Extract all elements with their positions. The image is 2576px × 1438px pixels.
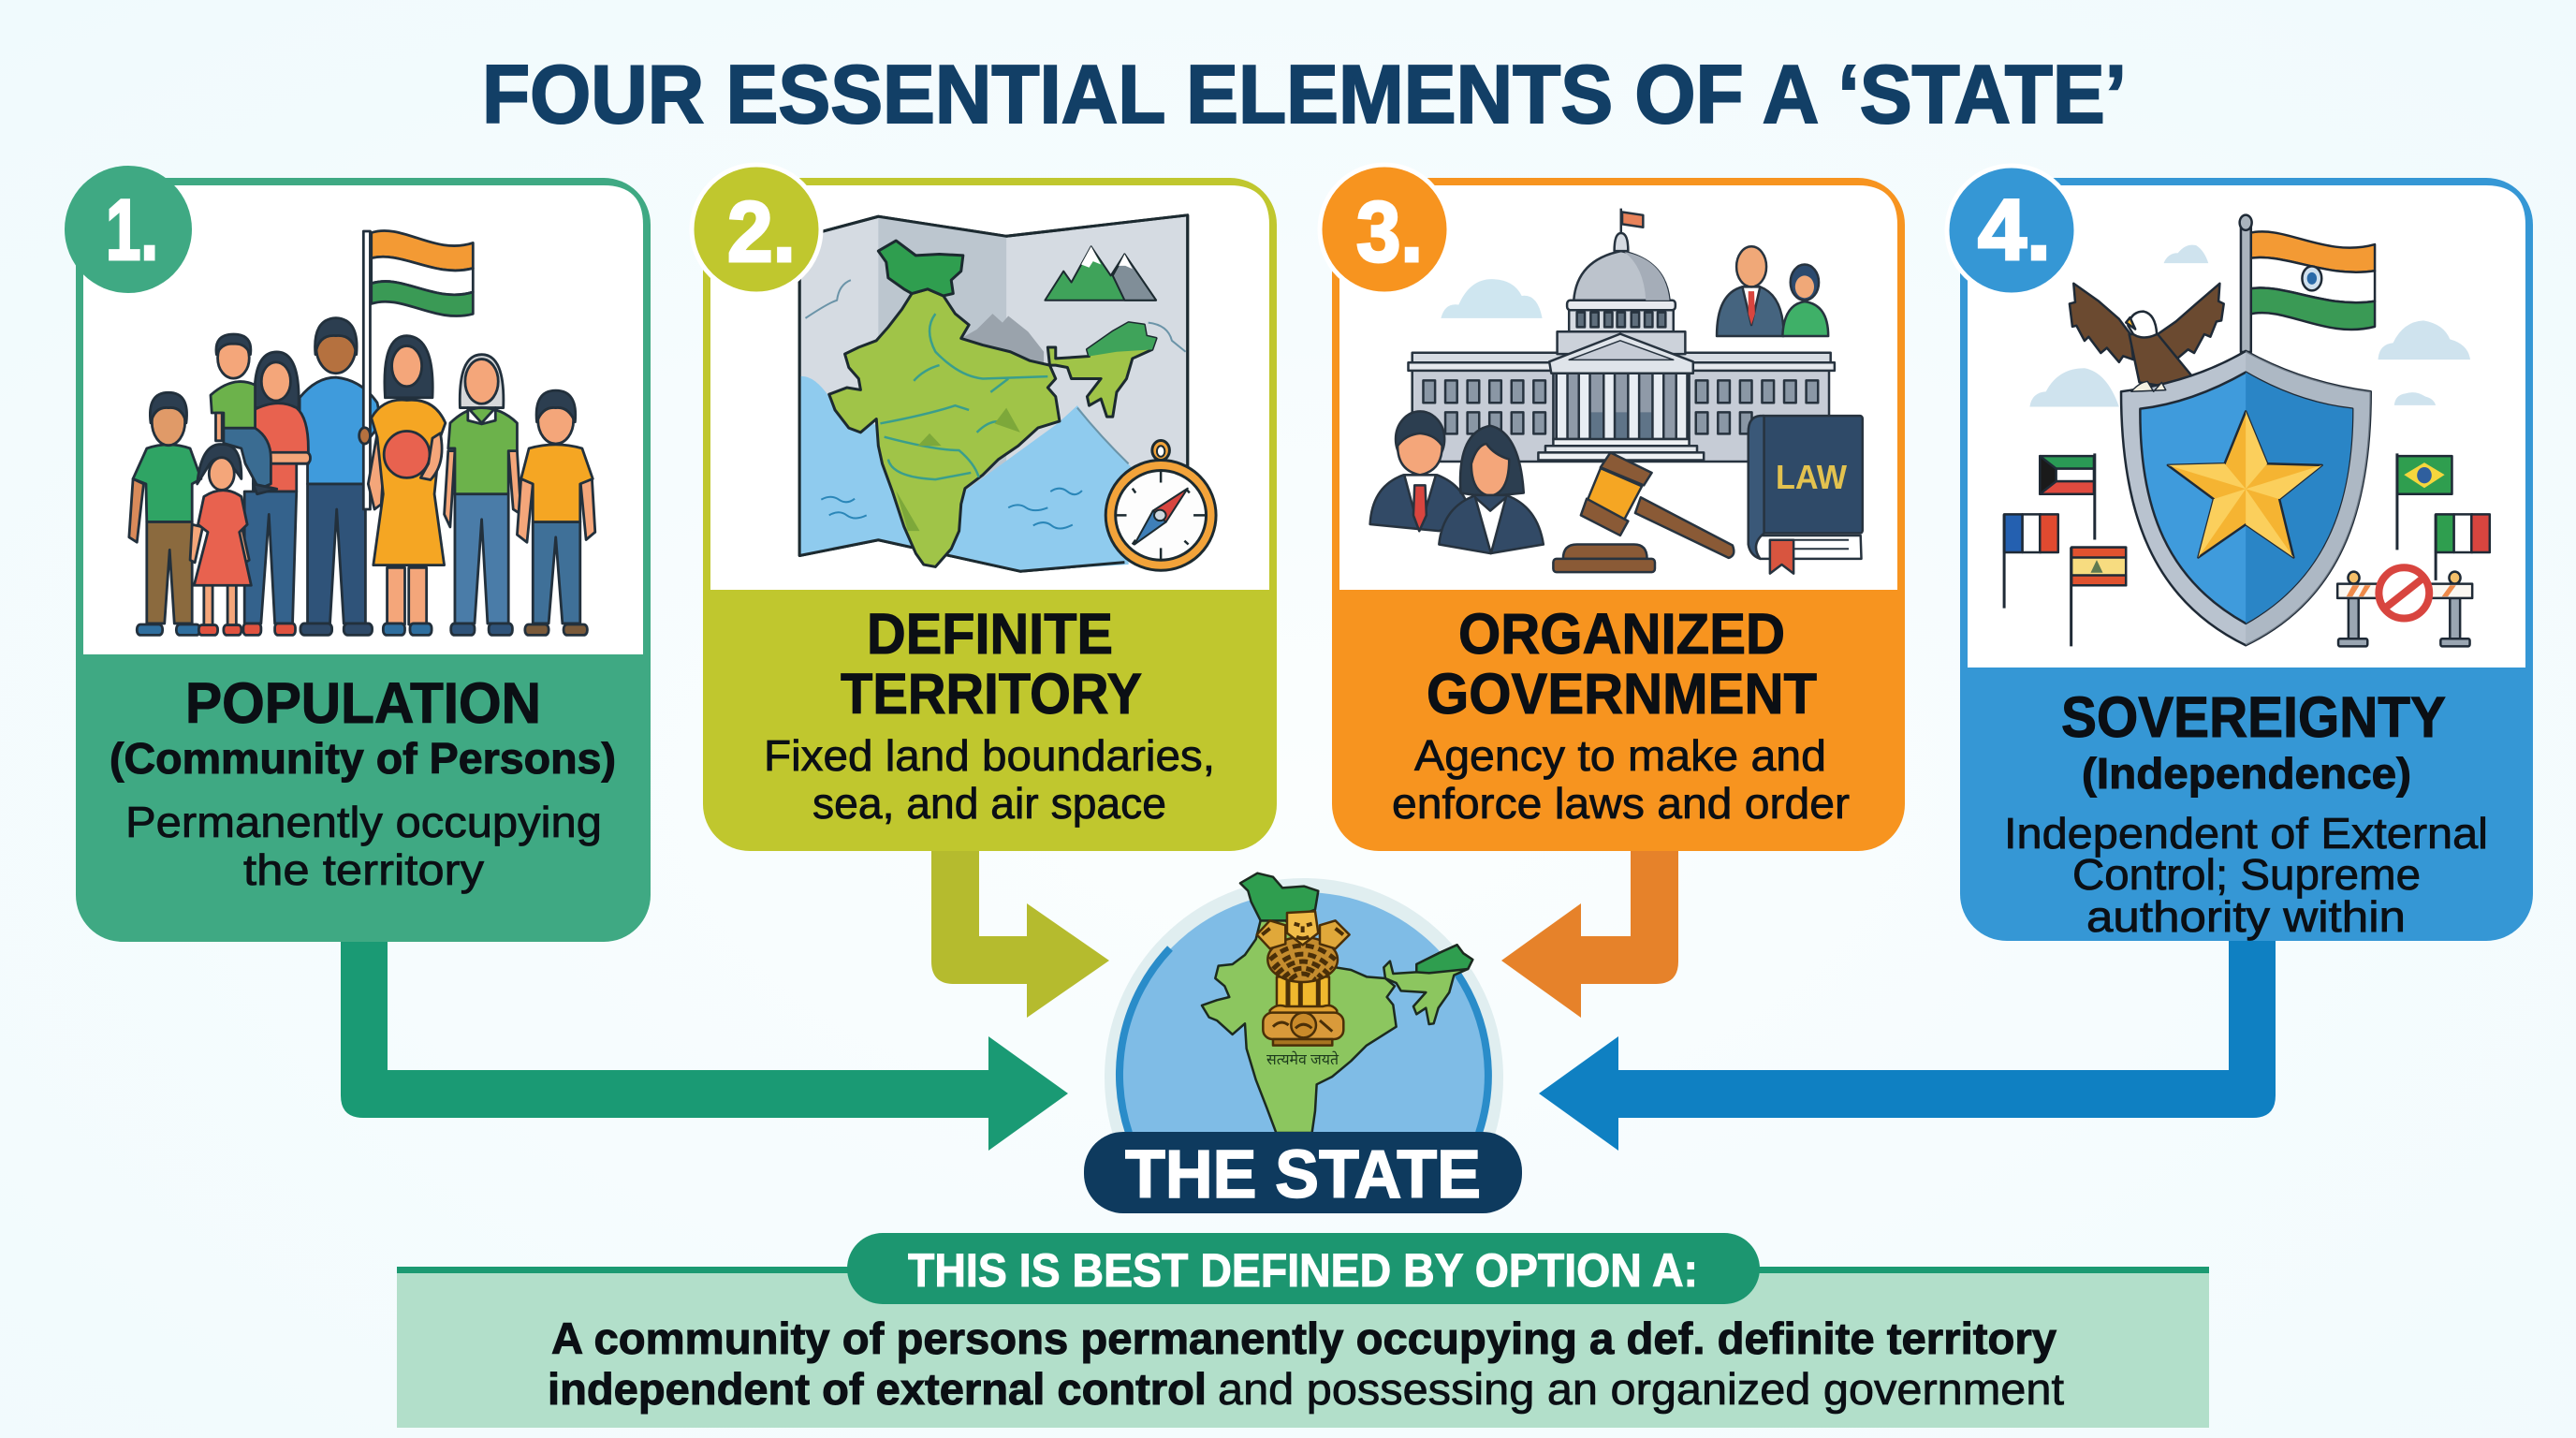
territory text: sea, and air space	[812, 779, 1166, 828]
the state label: THE STATE	[1125, 1137, 1481, 1212]
law book label: LAW	[1776, 458, 1847, 496]
population text: the territory	[243, 845, 484, 894]
territory text: DEFINITE	[867, 602, 1113, 666]
arrow: government to state	[1501, 843, 1678, 1018]
arrow: population to state	[341, 936, 1068, 1151]
ashoka emblem	[1257, 911, 1350, 1046]
panel: organized government	[1320, 165, 1905, 851]
answer text: A community of persons permanently occupying a def. definite territory	[551, 1313, 2056, 1363]
answer heading pill: THIS IS BEST DEFINED BY OPTION A:	[908, 1244, 1698, 1297]
sovereignty text: authority within	[2086, 892, 2406, 941]
answer text	[548, 1313, 2064, 1414]
illustration: people with flag	[129, 230, 595, 635]
government text: enforce laws and order	[1392, 779, 1850, 828]
population text: Permanently occupying	[125, 798, 602, 846]
answer panel	[397, 1233, 2209, 1428]
illustration: shield, eagle, flags and barrier	[2004, 215, 2490, 646]
sovereignty text: (Independence)	[2082, 749, 2411, 798]
badge: 1: 1.	[106, 183, 158, 278]
badge: 4: 4.	[1978, 183, 2051, 278]
answer text: and possessing an organized government	[1218, 1364, 2064, 1414]
government text	[1392, 602, 1850, 828]
population text: (Community of Persons)	[110, 734, 616, 783]
illustration: capitol, officials, gavel and law book	[1370, 209, 1863, 574]
sovereignty text: Control; Supreme	[2072, 850, 2421, 899]
title: FOUR ESSENTIAL ELEMENTS OF A ‘STATE’	[482, 48, 2127, 140]
sovereignty text: SOVEREIGNTY	[2061, 685, 2446, 749]
sovereignty text: Independent of External	[2004, 809, 2488, 858]
arrow: sovereignty to state	[1539, 936, 2276, 1151]
population text: POPULATION	[185, 671, 541, 735]
badge: 3: 3.	[1356, 184, 1423, 280]
territory text: Fixed land boundaries,	[764, 731, 1215, 780]
illustration: map with compass	[799, 215, 1216, 571]
panel: sovereignty	[1947, 166, 2533, 941]
badge: 2: 2.	[727, 184, 796, 280]
territory text: TERRITORY	[841, 662, 1142, 726]
badge: 1	[65, 166, 192, 293]
answer heading pill	[847, 1233, 1760, 1304]
badge: 4	[1947, 166, 2076, 295]
government text: Agency to make and	[1414, 731, 1826, 780]
panel: definite territory	[692, 165, 1277, 851]
territory text	[764, 602, 1215, 828]
government text: GOVERNMENT	[1427, 662, 1817, 726]
sovereignty text	[2004, 685, 2488, 941]
population text	[110, 671, 616, 894]
the state globe with map and emblem	[1105, 872, 1503, 1134]
arrow: territory to state	[931, 843, 1109, 1018]
the state globe with map and emblem: सत्यमेव जयते	[1266, 1050, 1339, 1071]
government text: ORGANIZED	[1458, 602, 1785, 666]
badge: 2	[692, 165, 821, 294]
panel: population	[65, 166, 651, 942]
badge: 3	[1320, 165, 1449, 294]
answer text: independent of external control	[548, 1364, 1207, 1414]
